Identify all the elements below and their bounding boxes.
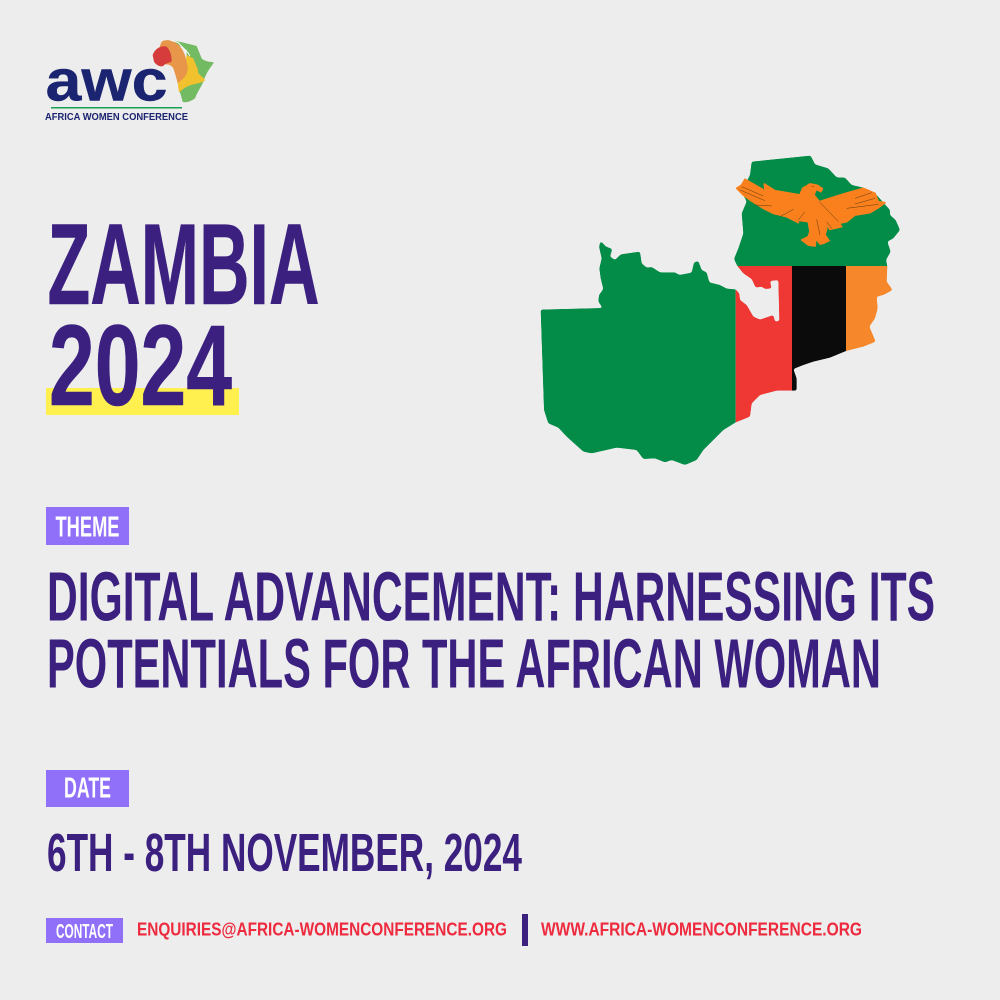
divider <box>522 914 528 946</box>
logo wordmark: awc <box>46 48 168 114</box>
title: Zambia: ZAMBIA <box>48 201 320 329</box>
icon: Africa map <box>153 40 214 102</box>
title: 2024: 2024 <box>49 302 232 430</box>
date text: 6TH - 8TH NOVEMBER, 2024 <box>47 823 522 883</box>
badge: theme <box>46 507 129 545</box>
heading: theme text <box>47 558 935 702</box>
highlight bar <box>46 388 239 415</box>
icon: orange eagle <box>737 179 885 246</box>
logo: Africa Women Conference <box>45 40 214 123</box>
map: Zambia with flag colours <box>540 156 900 465</box>
badge: contact: CONTACT <box>56 921 113 943</box>
contact website: WWW.AFRICA-WOMENCONFERENCE.ORG <box>541 918 862 940</box>
badge: contact <box>46 918 123 943</box>
badge: theme: THEME <box>56 512 120 544</box>
badge: date: DATE <box>64 772 111 804</box>
badge: date <box>46 770 129 807</box>
contact email: ENQUIRIES@AFRICA-WOMENCONFERENCE.ORG <box>137 918 507 940</box>
logo tagline: AFRICA WOMEN CONFERENCE <box>45 111 188 123</box>
